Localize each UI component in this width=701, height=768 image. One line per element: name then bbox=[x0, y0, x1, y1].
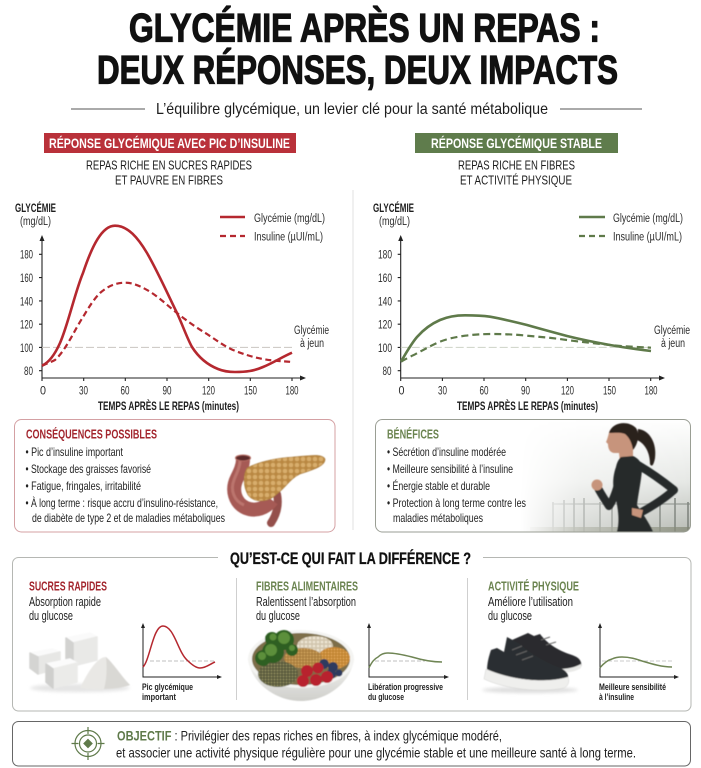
ponytail bbox=[637, 429, 655, 466]
fasting label: à jeun bbox=[300, 338, 324, 350]
y tick labels: 140 bbox=[20, 296, 33, 308]
left meal description: REPAS RICHE EN SUCRES RAPIDES bbox=[86, 158, 252, 172]
x tick labels: 120 bbox=[202, 386, 215, 398]
y axis title: (mg/dL) bbox=[20, 216, 51, 228]
y axis title: GLYCÉMIE bbox=[373, 202, 414, 215]
fasting label: Glycémie bbox=[654, 325, 690, 337]
banner: stable response: RÉPONSE GLYCÉMIQUE STABLE bbox=[431, 135, 602, 151]
y tick labels bbox=[20, 250, 33, 378]
icon: target bbox=[72, 727, 104, 760]
legend: Insuline (µUI/mL) bbox=[254, 232, 323, 244]
legend bbox=[220, 213, 325, 244]
bullet list: maladies métaboliques bbox=[393, 511, 483, 525]
banner: stable response bbox=[415, 133, 618, 153]
y axis title bbox=[15, 202, 56, 228]
x tick labels: 150 bbox=[603, 386, 616, 398]
x tick labels: 60 bbox=[120, 386, 130, 398]
face and neck bbox=[606, 430, 634, 459]
y tick labels: 120 bbox=[20, 320, 33, 332]
heading: CONSÉQUENCES POSSIBLES bbox=[26, 426, 157, 442]
y tick labels: 80 bbox=[382, 366, 392, 378]
chart: glycemic peak bbox=[15, 202, 329, 413]
mini chart: better sensitivity bbox=[598, 623, 679, 679]
fasting label: à jeun bbox=[661, 338, 685, 350]
back shoe bbox=[512, 633, 581, 670]
right meal description: REPAS RICHE EN FIBRES bbox=[458, 158, 575, 172]
description bbox=[488, 595, 573, 623]
x tick labels: 180 bbox=[644, 386, 658, 398]
insulin curve bbox=[42, 283, 292, 366]
legend: Insuline (µUI/mL) bbox=[613, 232, 682, 244]
description bbox=[256, 595, 356, 623]
description: Absorption rapide bbox=[29, 595, 101, 609]
fasting baseline bbox=[401, 346, 650, 348]
photo: runner in fog bbox=[530, 422, 690, 532]
banner: glycemic peak bbox=[44, 133, 296, 153]
mini chart: glycemic peak bbox=[141, 623, 222, 679]
column: physical activity bbox=[482, 578, 679, 703]
column: fast sugars bbox=[29, 580, 222, 703]
x tick labels: 30 bbox=[79, 386, 88, 398]
torso bbox=[613, 456, 653, 532]
heading: SUCRES RAPIDES bbox=[29, 580, 107, 594]
bullet list: • Meilleure sensibilité à l’insuline bbox=[387, 462, 513, 476]
description: Améliore l’utilisation bbox=[488, 595, 573, 609]
fasting label bbox=[654, 325, 690, 350]
mini chart: progressive release bbox=[367, 623, 449, 679]
bullet list: • Sécrétion d’insuline modérée bbox=[387, 445, 506, 459]
description: du glucose bbox=[488, 609, 532, 623]
y tick labels: 180 bbox=[378, 250, 392, 262]
x tick labels: 0 bbox=[40, 386, 46, 398]
bullet list bbox=[26, 445, 225, 525]
description bbox=[29, 595, 101, 623]
y axis title: (mg/dL) bbox=[379, 216, 410, 228]
x tick labels: 0 bbox=[398, 386, 404, 398]
caption: Libération progressive bbox=[368, 682, 443, 693]
axes bbox=[39, 235, 306, 381]
panel: consequences bbox=[14, 420, 335, 532]
section heading: QU’EST-CE QUI FAIT LA DIFFÉRENCE ? bbox=[230, 549, 471, 568]
chart: stable response bbox=[373, 202, 690, 413]
y tick labels: 120 bbox=[378, 320, 392, 332]
objective text bbox=[116, 728, 636, 760]
image: running shoes bbox=[482, 633, 581, 693]
y tick labels bbox=[378, 250, 392, 378]
panel: what makes the difference bbox=[12, 549, 691, 711]
description: du glucose bbox=[29, 609, 73, 623]
fasting label bbox=[294, 325, 329, 350]
glucose curve bbox=[42, 226, 292, 372]
y tick labels: 160 bbox=[20, 273, 33, 285]
x tick labels bbox=[398, 386, 658, 398]
y axis title: GLYCÉMIE bbox=[15, 202, 56, 215]
caption: à l’insuline bbox=[599, 692, 634, 703]
image: sugar cubes bbox=[30, 633, 130, 692]
panel: right response header bbox=[415, 133, 618, 188]
subtitle: L’équilibre glycémique, un levier clé pour la santé métabolique bbox=[156, 101, 548, 118]
axes bbox=[398, 235, 665, 381]
objective text: OBJECTIF : Privilégier des repas riches en fibres, à index glycémique modéré, bbox=[117, 728, 502, 744]
bullet list: • Fatigue, fringales, irritabilité bbox=[26, 479, 141, 493]
y tick labels: 80 bbox=[24, 366, 33, 378]
heading: ACTIVITÉ PHYSIQUE bbox=[488, 578, 579, 594]
bullet list: • Pic d’insuline important bbox=[26, 445, 123, 459]
bullet list: de diabète de type 2 et de maladies métaboliques bbox=[32, 511, 225, 525]
caption: Meilleure sensibilité bbox=[599, 682, 666, 693]
bullet list: • Énergie stable et durable bbox=[387, 478, 490, 493]
x tick labels: 180 bbox=[286, 386, 298, 398]
icon: pancreas and duodenum bbox=[232, 455, 325, 523]
bullet list: • À long terme : risque accru d’insulino-résistance, bbox=[26, 495, 218, 510]
heading: FIBRES ALIMENTAIRES bbox=[256, 580, 358, 594]
right meal description: ET ACTIVITÉ PHYSIQUE bbox=[460, 172, 572, 188]
legend: Glycémie (mg/dL) bbox=[254, 213, 325, 225]
y axis title bbox=[373, 202, 414, 228]
banner: glycemic peak: RÉPONSE GLYCÉMIQUE AVEC PIC D’INSULINE bbox=[49, 135, 290, 151]
x tick labels: 60 bbox=[480, 386, 488, 398]
fists bbox=[592, 480, 602, 490]
bullet list bbox=[387, 445, 526, 525]
x axis title: TEMPS APRÈS LE REPAS (minutes) bbox=[98, 400, 239, 413]
x tick labels: 150 bbox=[244, 386, 257, 398]
title bbox=[97, 6, 618, 92]
right meal description bbox=[458, 158, 575, 188]
caption: important bbox=[142, 692, 177, 703]
y tick labels: 100 bbox=[20, 343, 33, 355]
y tick labels: 160 bbox=[378, 273, 392, 285]
fasting label: Glycémie bbox=[294, 325, 329, 337]
bullet list: • Protection à long terme contre les bbox=[387, 496, 526, 510]
insulin curve bbox=[401, 334, 651, 362]
caption: Pic glycémique bbox=[142, 682, 193, 693]
image: bowl of fibre foods bbox=[248, 630, 354, 701]
x tick labels: 120 bbox=[561, 386, 574, 398]
arm: hand on hip bbox=[638, 465, 674, 513]
x tick labels bbox=[40, 386, 298, 398]
y tick labels: 180 bbox=[20, 250, 33, 262]
bullet list: • Stockage des graisses favorisé bbox=[26, 462, 151, 476]
y tick labels: 100 bbox=[378, 343, 392, 355]
x tick labels: 30 bbox=[438, 386, 447, 398]
description: du glucose bbox=[256, 609, 300, 623]
arm: forward fist bbox=[594, 486, 617, 511]
heading: BÉNÉFICES bbox=[387, 426, 439, 442]
x tick labels: 90 bbox=[521, 386, 530, 398]
caption bbox=[368, 682, 443, 703]
hair bbox=[609, 423, 638, 450]
y tick labels: 140 bbox=[378, 296, 392, 308]
x tick labels: 90 bbox=[162, 386, 172, 398]
legend bbox=[579, 213, 683, 244]
caption bbox=[599, 682, 666, 703]
glucose curve bbox=[401, 315, 651, 362]
panel: objective callout bbox=[12, 722, 690, 766]
description: Ralentissent l’absorption bbox=[256, 595, 356, 609]
column: dietary fibre bbox=[248, 580, 449, 703]
panel: left response header bbox=[44, 133, 296, 188]
fasting baseline bbox=[42, 346, 292, 348]
x axis title: TEMPS APRÈS LE REPAS (minutes) bbox=[457, 400, 598, 413]
left meal description bbox=[86, 158, 252, 188]
left meal description: ET PAUVRE EN FIBRES bbox=[115, 172, 223, 188]
front shoe bbox=[487, 637, 568, 681]
caption: du glucose bbox=[368, 692, 404, 703]
caption bbox=[142, 682, 193, 703]
panel: benefits bbox=[376, 419, 691, 532]
